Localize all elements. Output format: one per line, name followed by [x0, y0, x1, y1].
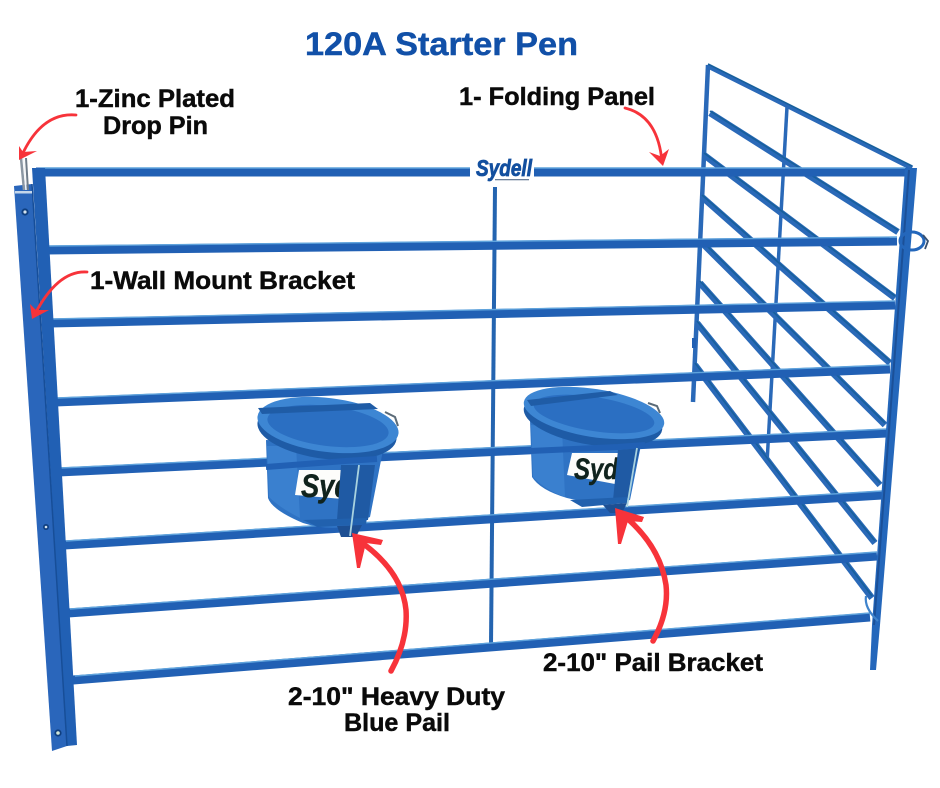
arrow: folding panel	[625, 108, 669, 166]
pail right	[520, 378, 668, 513]
folding panel	[692, 64, 912, 598]
right upright	[870, 168, 917, 670]
front rail over bucket	[530, 445, 645, 451]
wall mount bracket	[14, 184, 67, 751]
pail right: Syd	[574, 453, 619, 486]
label: drop pin	[75, 85, 235, 140]
lid	[520, 378, 668, 448]
pin	[350, 465, 359, 536]
center upright	[491, 187, 495, 645]
arrow: pail bracket	[615, 508, 666, 641]
label: blue pail: Blue Pail	[344, 709, 450, 737]
label: blue pail	[288, 683, 505, 737]
bracket	[337, 465, 375, 520]
handle clip	[648, 403, 660, 413]
front panel frame	[32, 168, 917, 746]
label	[567, 453, 619, 484]
label	[295, 470, 372, 501]
arrow: drop pin	[19, 115, 76, 160]
label: blue pail: 2-10" Heavy Duty	[288, 683, 505, 711]
title: 120A Starter Pen	[305, 26, 578, 62]
lid strap	[527, 391, 618, 406]
left upright tube	[32, 168, 77, 746]
arrow: wall mount bracket	[30, 272, 87, 319]
front rail over bucket	[266, 459, 377, 467]
bracket	[613, 448, 640, 500]
pin	[627, 448, 637, 507]
label: wall mount bracket: 1-Wall Mount Bracket	[90, 267, 356, 295]
bucket body	[266, 440, 384, 528]
lid	[254, 390, 402, 460]
label: drop pin: Drop Pin	[103, 112, 208, 140]
label: drop pin: 1-Zinc Plated	[75, 85, 235, 113]
drop pin	[21, 158, 28, 190]
handle clip	[385, 412, 398, 426]
arrow: blue pail	[352, 533, 406, 671]
bucket body	[530, 420, 644, 503]
label: pail bracket: 2-10" Pail Bracket	[543, 649, 764, 677]
lid strap	[258, 403, 378, 414]
pail left: Syd	[301, 468, 352, 504]
rails	[36, 168, 908, 176]
latch ring	[900, 232, 928, 250]
rim underside	[254, 395, 400, 467]
label: folding panel: 1- Folding Panel	[459, 83, 655, 111]
pail left	[254, 390, 402, 537]
sydell logo: Sydell	[476, 155, 532, 181]
lower hinge	[866, 596, 878, 621]
rim underside	[520, 382, 666, 456]
